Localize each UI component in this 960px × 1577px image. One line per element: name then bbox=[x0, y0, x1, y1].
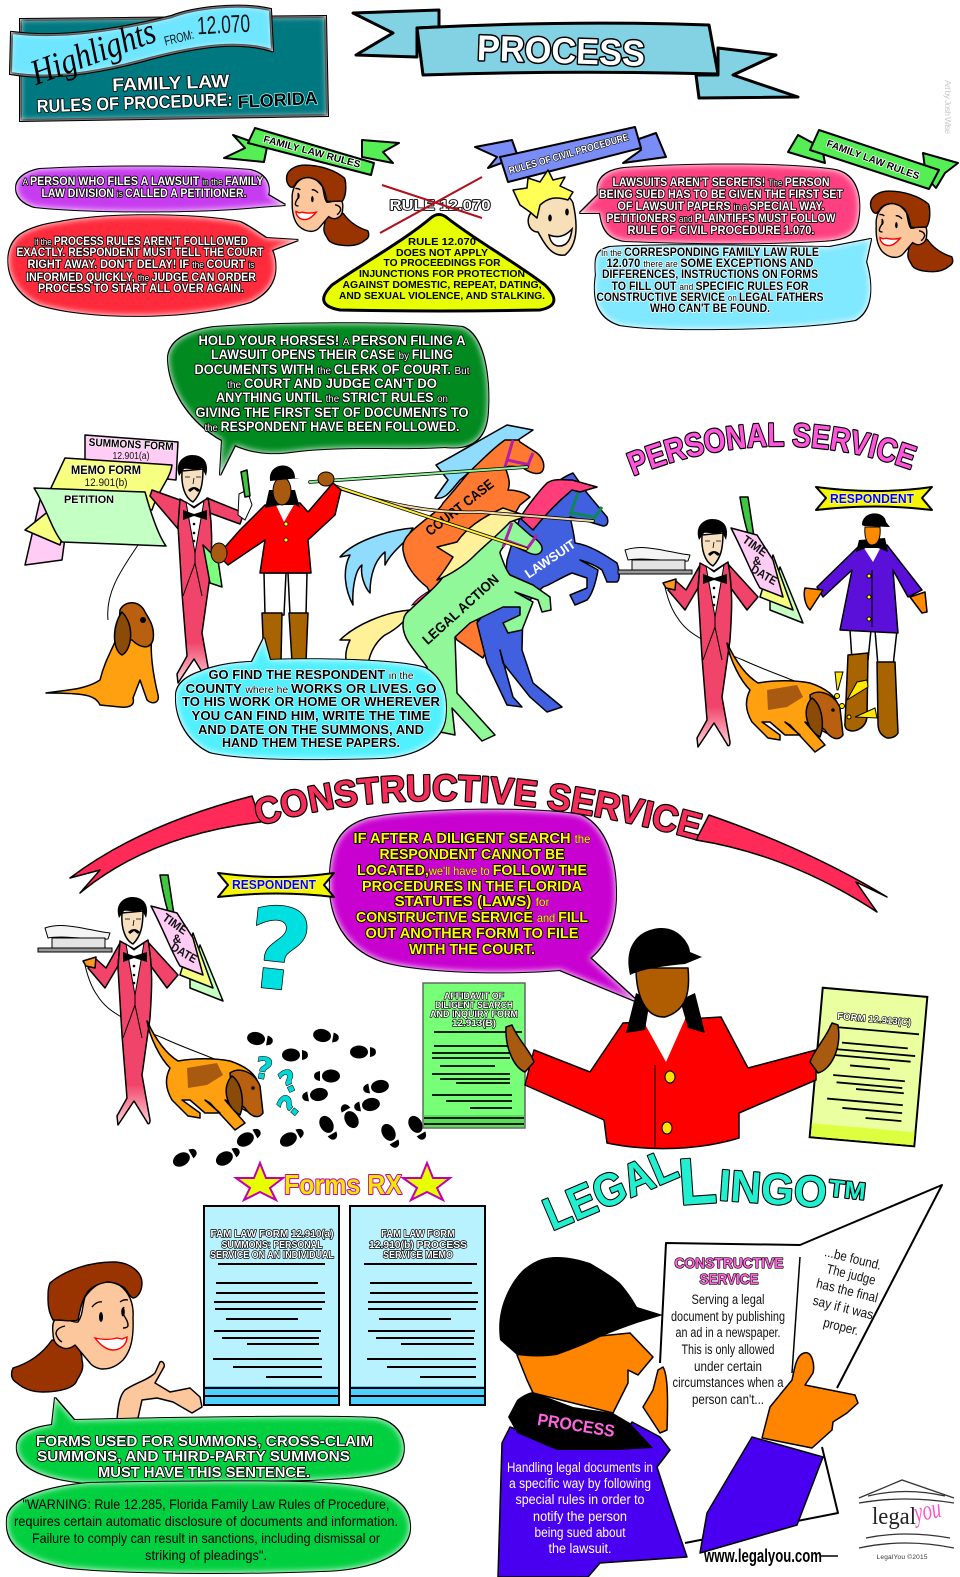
character: large rider bbox=[506, 928, 839, 1149]
ribbon: respondent: RESPONDENT bbox=[830, 492, 914, 506]
highlights ribbon bbox=[11, 7, 272, 76]
ribbon: respondent two bbox=[218, 873, 334, 897]
time and date text bbox=[160, 911, 200, 966]
logo: legalyou: legal bbox=[872, 1504, 916, 1530]
reader coat bbox=[498, 1422, 687, 1577]
form: summons personal service bbox=[204, 1206, 339, 1405]
reader hand left bbox=[643, 1367, 668, 1433]
petition form bbox=[34, 488, 166, 546]
form: affidavit of diligent search: AND INQUIRY FORM bbox=[430, 1009, 518, 1019]
definition of process bbox=[507, 1460, 653, 1556]
definition of process: notify the person bbox=[533, 1509, 627, 1524]
rules of procedure title: RULES OF PROCEDURE: bbox=[37, 90, 233, 116]
article left column: document by publishing bbox=[671, 1309, 785, 1324]
article right column: The judge bbox=[825, 1261, 877, 1288]
bubble: go find the respondent: AND DATE ON THE SUMMONS, AND bbox=[198, 722, 424, 737]
from label: FROM: bbox=[163, 27, 195, 49]
bubble: lawsuits aren't secrets: PETITIONERS and PLAINTIFFS MUST FOLLOW bbox=[606, 213, 836, 225]
ribbon: respondent bbox=[816, 487, 932, 510]
website address: www.legalyou.com bbox=[703, 1546, 822, 1566]
character: woman one bbox=[287, 165, 369, 246]
horse: lawsuit: LAWSUIT bbox=[522, 536, 578, 581]
title: forms rx bbox=[236, 1163, 450, 1200]
stack of forms: MEMO FORM bbox=[71, 463, 141, 477]
time and date text: & bbox=[753, 554, 762, 568]
logo: legalyou: you bbox=[909, 1493, 944, 1529]
papers behind bbox=[25, 500, 70, 565]
bubble: hold your horses: HOLD YOUR HORSES! A PERSON FILING A bbox=[198, 333, 466, 348]
article left column: an ad in a newspaper. bbox=[676, 1325, 780, 1340]
bubble: warning sentence: striking of pleadings". bbox=[145, 1547, 267, 1563]
bubble: warning sentence: requires certain automatic disclosure of documents and information. bbox=[14, 1513, 398, 1529]
ribbon: family law rules right: FAMILY LAW RULES bbox=[825, 139, 921, 183]
process title: PROCESS bbox=[476, 27, 646, 74]
time and date text: & bbox=[173, 932, 182, 946]
bubble: corresponding family law rule: TO FILL OUT and SPECIFIC RULES FOR bbox=[612, 281, 809, 293]
rule crossed out bbox=[380, 177, 490, 233]
sign: rule 12.070 exception: TO PROCEEDINGS FOR bbox=[384, 257, 501, 269]
form: process service memo: 12.910(b) PROCESS bbox=[369, 1240, 467, 1251]
bubble: diligent search: OUT ANOTHER FORM TO FILE bbox=[366, 925, 578, 942]
title: legal lingo: L bbox=[676, 1142, 719, 1219]
leash dog one bbox=[108, 545, 138, 620]
title: legal lingo: INGO bbox=[717, 1161, 828, 1218]
bubble: petitioner bbox=[16, 166, 285, 212]
article right column: ...be found. bbox=[823, 1244, 883, 1273]
form: affidavit of diligent search: AFFIDAVIT OF bbox=[444, 991, 504, 1001]
horses bbox=[310, 425, 619, 741]
character: sitting dog bbox=[46, 603, 158, 707]
summons form bbox=[85, 435, 178, 480]
title: legal lingo: TM bbox=[827, 1175, 867, 1206]
bubble: petitioner: LAW DIVISION is CALLED A PETITIONER. bbox=[42, 188, 246, 200]
bubble: petitioner: A PERSON WHO FILES A LAWSUIT in the FAMILY bbox=[22, 176, 264, 188]
family law title: FAMILY LAW bbox=[112, 71, 230, 95]
article right column: has the final bbox=[815, 1276, 879, 1305]
bubble: warning sentence bbox=[7, 1481, 410, 1573]
form: affidavit of diligent search: DILIGENT SEARCH bbox=[435, 1000, 513, 1010]
small question marks: ? bbox=[271, 1089, 309, 1125]
form: 12.913(c) bbox=[810, 988, 927, 1146]
bubble: go find the respondent: YOU CAN FIND HIM, WRITE THE TIME bbox=[192, 708, 431, 723]
small question marks: ? bbox=[274, 1063, 304, 1102]
reader collar bbox=[508, 1392, 653, 1450]
article right column bbox=[811, 1244, 883, 1338]
rule crossed out: RULE 12.070 bbox=[390, 197, 490, 214]
title: forms rx: Forms RX bbox=[284, 1169, 402, 1200]
ribbon: rules of civil procedure: RULES OF CIVIL PROCEDURE bbox=[508, 132, 630, 177]
bubble: hold your horses: GIVING THE FIRST SET OF DOCUMENTS TO bbox=[196, 405, 468, 420]
sign: rule 12.070 exception bbox=[324, 214, 554, 311]
form: summons personal service: FAM LAW FORM 12.910(a) bbox=[210, 1229, 334, 1240]
bubble: hold your horses bbox=[168, 323, 488, 475]
bubble: hold your horses: the RESPONDENT HAVE BEEN FOLLOWED. bbox=[204, 419, 460, 434]
bubble: lawsuits aren't secrets bbox=[580, 164, 859, 243]
bubble: forms must have this sentence: FORMS USED FOR SUMMONS, CROSS-CLAIM bbox=[36, 1433, 373, 1450]
process collar text: PROCESS bbox=[536, 1410, 616, 1441]
bubble: diligent search: CONSTRUCTIVE SERVICE and FILL bbox=[356, 909, 588, 926]
time and date text: TIME bbox=[160, 911, 190, 937]
bubble: corresponding family law rule: In the CORRESPONDING FAMILY LAW RULE bbox=[601, 247, 819, 259]
sign: rule 12.070 exception: RULE 12.070 bbox=[408, 236, 476, 248]
bubble: corresponding family law rule: WHO CAN'T BE FOUND. bbox=[650, 303, 770, 315]
bubble: diligent search: LOCATED,we'll have to FOLLOW THE bbox=[357, 862, 587, 879]
bubble: hold your horses: LAWSUIT OPENS THEIR CASE by FILING bbox=[211, 347, 453, 362]
horse: court case bbox=[403, 425, 544, 658]
reader hat bbox=[499, 1257, 663, 1356]
ribbon: family law rules left: FAMILY LAW RULES bbox=[262, 134, 362, 171]
bubble: hold your horses: DOCUMENTS WITH the CLERK OF COURT. But bbox=[194, 362, 470, 377]
ribbon: family law rules left bbox=[224, 128, 399, 175]
article right column: say if it was bbox=[811, 1293, 875, 1322]
character: rider in red bbox=[203, 465, 341, 662]
bubble: process rules warning: If the PROCESS RULES AREN'T FOLLLOWED bbox=[34, 236, 248, 248]
small question marks bbox=[252, 1051, 309, 1125]
footprints bbox=[170, 1028, 430, 1170]
article left column: circumstances when a bbox=[672, 1375, 784, 1390]
header: highlights panel bbox=[11, 7, 327, 120]
teal box bbox=[21, 17, 327, 120]
reader face bbox=[517, 1333, 653, 1413]
article left column: This is only allowed bbox=[682, 1342, 774, 1357]
newspaper bbox=[640, 1185, 942, 1543]
bubble: corresponding family law rule: CONSTRUCTIVE SERVICE on LEGAL FATHERS bbox=[596, 292, 824, 304]
title: personal service: PERSONAL SERVICE bbox=[626, 422, 918, 476]
bubble: lawsuits aren't secrets: BEING SUED HAS TO BE GIVEN THE FIRST SET bbox=[599, 189, 843, 201]
bubble: diligent search bbox=[330, 810, 638, 1002]
character: sniffing dog bbox=[727, 643, 843, 752]
sign: rule 12.070 exception: AGAINST DOMESTIC, REPEAT, DATING, bbox=[342, 279, 542, 291]
form: process service memo: SERVICE MEMO bbox=[383, 1250, 453, 1261]
ribbon: rules of civil procedure bbox=[475, 127, 666, 182]
small question marks: ? bbox=[252, 1051, 275, 1088]
article left column: person can't... bbox=[692, 1392, 764, 1407]
stack of forms: 12.901(a) bbox=[112, 451, 150, 462]
form: summons personal service: SUMMONS: PERSONAL bbox=[222, 1240, 322, 1251]
reader hand right bbox=[762, 1353, 858, 1448]
horse: legal action bbox=[403, 508, 551, 741]
time and date text: TIME bbox=[740, 533, 770, 559]
character: butler with forms bbox=[150, 455, 252, 683]
sign: rule 12.070 exception: INJUNCTIONS FOR PROTECTION bbox=[359, 268, 525, 280]
form: affidavit of diligent search: 12.913(B) bbox=[452, 1018, 496, 1028]
horse tail: yellow bbox=[340, 610, 410, 665]
character: searching butler bbox=[38, 875, 263, 1130]
character: woman three bbox=[12, 1262, 202, 1420]
horse: court case: COURT CASE bbox=[422, 476, 497, 539]
ribbon: family law rules right bbox=[788, 130, 958, 189]
bubble: forms must have this sentence bbox=[17, 1398, 404, 1483]
article right column: proper. bbox=[822, 1315, 860, 1338]
character: respondent in purple bbox=[804, 513, 927, 738]
bubble: corresponding family law rule: DIFFERENCES, INSTRUCTIONS ON FORMS bbox=[602, 269, 818, 281]
memo form bbox=[50, 458, 172, 510]
sign: rule 12.070 exception: DOES NOT APPLY bbox=[396, 247, 488, 259]
bubble: go find the respondent bbox=[176, 638, 446, 759]
character: woman two bbox=[871, 191, 953, 272]
reins bbox=[310, 467, 593, 549]
definition of process: special rules in order to bbox=[516, 1492, 644, 1507]
bubble: process rules warning bbox=[8, 215, 298, 316]
bubble: diligent search: PROCEDURES IN THE FLORIDA bbox=[362, 878, 582, 895]
ribbon: respondent two: RESPONDENT bbox=[232, 878, 316, 892]
bubble: lawsuits aren't secrets: RULE OF CIVIL PROCEDURE 1.070. bbox=[628, 225, 814, 237]
time and date text: DATE bbox=[748, 562, 780, 588]
form: process service memo bbox=[350, 1206, 485, 1405]
bubble: process rules warning: PROCESS TO START ALL OVER AGAIN. bbox=[38, 283, 244, 295]
form: process service memo: FAM LAW FORM bbox=[381, 1229, 455, 1240]
form: 12.913(c): FORM 12.913(C) bbox=[837, 1011, 911, 1029]
character: reader with newspaper bbox=[498, 1257, 858, 1577]
sign: rule 12.070 exception: AND SEXUAL VIOLENCE, AND STALKING. bbox=[339, 290, 545, 302]
bubble: diligent search: IF AFTER A DILIGENT SEARCH the bbox=[354, 830, 590, 847]
time and date text: DATE bbox=[168, 940, 200, 966]
definition of process: a specific way by following bbox=[509, 1476, 651, 1491]
bubble: go find the respondent: GO FIND THE RESPONDENT in the bbox=[208, 667, 414, 682]
bubble: diligent search: STATUTES (LAWS) for bbox=[394, 893, 550, 910]
horse tail: blue bbox=[340, 528, 413, 605]
form: affidavit of diligent search bbox=[423, 983, 525, 1128]
rule number: 12.070 bbox=[196, 10, 251, 40]
bubble: process rules warning: RIGHT AWAY. DON'T DELAY! IF the COURT is bbox=[28, 259, 255, 271]
bubble: corresponding family law rule bbox=[595, 239, 871, 329]
reader sleeve bbox=[700, 1437, 823, 1553]
florida: FLORIDA bbox=[237, 88, 318, 112]
bubble: warning sentence: "WARNING: Rule 12.285, Florida Family Law Rules of Procedure, bbox=[22, 1496, 390, 1512]
stack of forms: 12.901(b) bbox=[84, 477, 128, 489]
definition of process: being sued about bbox=[534, 1525, 626, 1540]
form: summons personal service: SERVICE ON AN INDIVIDUAL bbox=[210, 1250, 334, 1261]
icon: big question mark: ? bbox=[240, 883, 318, 1019]
highlights script: Highlights bbox=[24, 11, 161, 93]
bubble: forms must have this sentence: MUST HAVE THIS SENTENCE. bbox=[98, 1464, 310, 1481]
bubble: lawsuits aren't secrets: OF LAWSUIT PAPERS in a SPECIAL WAY. bbox=[618, 201, 824, 213]
bubble: forms must have this sentence: SUMMONS, AND THIRD-PARTY SUMMONS bbox=[37, 1448, 350, 1465]
alert marks bbox=[834, 672, 877, 719]
article left column: Serving a legal bbox=[692, 1292, 764, 1307]
logo: legalyou bbox=[859, 1480, 954, 1561]
stack of forms bbox=[25, 435, 178, 565]
bubble: diligent search: RESPONDENT CANNOT BE bbox=[380, 846, 564, 863]
process banner bbox=[353, 10, 798, 98]
bubble: lawsuits aren't secrets: LAWSUITS AREN'T SECRETS! The PERSON bbox=[612, 177, 830, 189]
article left column: under certain bbox=[694, 1359, 762, 1374]
newspaper: SERVICE bbox=[700, 1271, 758, 1288]
bubble: warning sentence: Failure to comply can result in sanctions, including dismissal or bbox=[32, 1530, 380, 1546]
horse: legal action: LEGAL ACTION bbox=[419, 571, 502, 648]
title ribbons: constructive service bbox=[70, 796, 887, 912]
title: legal lingo: LEGAL bbox=[536, 1138, 685, 1240]
title: legal lingo bbox=[536, 1138, 867, 1240]
stack of forms: PETITION bbox=[64, 494, 114, 506]
bubble: diligent search: WITH THE COURT. bbox=[409, 941, 535, 958]
bubble: corresponding family law rule: 12.070 there are SOME EXCEPTIONS AND bbox=[606, 258, 814, 270]
bubble: hold your horses: ANYTHING UNTIL the STRICT RULES on bbox=[216, 390, 448, 405]
bubble: process rules warning: INFORMED QUICKLY, the JUDGE CAN ORDER bbox=[26, 272, 257, 284]
time and date text bbox=[740, 533, 780, 588]
character: butler with papers bbox=[618, 497, 823, 747]
definition of process: Handling legal documents in bbox=[507, 1460, 653, 1475]
bubble: go find the respondent: COUNTY where he WORKS OR LIVES. GO bbox=[186, 681, 436, 696]
horse: lawsuit bbox=[477, 473, 619, 712]
article heading: CONSTRUCTIVE bbox=[674, 1255, 784, 1272]
character: blonde man bbox=[513, 170, 576, 255]
bubble: process rules warning: EXACTLY. RESPONDENT MUST TELL THE COURT bbox=[16, 247, 264, 259]
bubble: go find the respondent: HAND THEM THESE PAPERS. bbox=[222, 735, 400, 750]
definition of process: the lawsuit. bbox=[548, 1541, 612, 1556]
bubble: hold your horses: the COURT AND JUDGE CAN'T DO bbox=[227, 376, 437, 391]
stack of forms: SUMMONS FORM bbox=[88, 437, 174, 453]
logo: legalyou: LegalYou ©2015 bbox=[876, 1553, 928, 1561]
article left column bbox=[671, 1292, 785, 1407]
bubble: go find the respondent: TO HIS WORK OR HOME OR WHEREVER bbox=[182, 694, 441, 709]
art credit: Art by Josh Wise bbox=[943, 80, 953, 134]
title: constructive service: CONSTRUCTIVE SERVICE bbox=[254, 774, 704, 840]
